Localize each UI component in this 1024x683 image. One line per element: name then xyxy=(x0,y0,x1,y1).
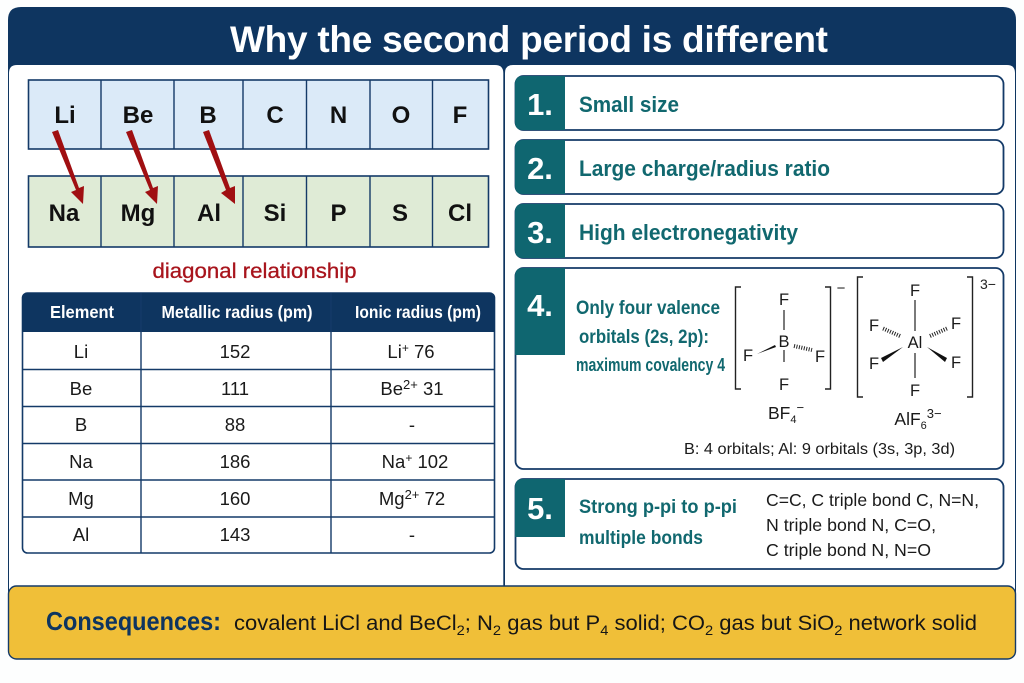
card 5: multiple bonds xyxy=(515,479,1004,569)
table header xyxy=(22,293,495,332)
table rows: Li xyxy=(74,341,88,362)
period 2 row: F xyxy=(453,102,467,129)
card 5 bond list: C=C, C triple bond C, N=N, xyxy=(766,490,979,510)
structure: BF4: BF xyxy=(768,403,790,423)
period 3 row: Cl xyxy=(448,200,472,227)
table rows: B xyxy=(75,414,87,435)
consequences banner: ; N xyxy=(465,612,493,635)
card 3: electronegativity: 3. xyxy=(527,215,553,250)
consequences banner: Consequences: xyxy=(46,606,221,636)
consequences banner: covalent LiCl and BeCl xyxy=(234,612,446,635)
table rows: 102 xyxy=(412,451,448,472)
card 4 text xyxy=(576,297,725,375)
table rows xyxy=(68,341,448,545)
table rows: 152 xyxy=(220,341,250,362)
structure: AlF6: 3− xyxy=(927,406,942,421)
table rows: 2+ xyxy=(405,487,419,502)
consequences banner: 2 xyxy=(457,622,465,638)
period 3 row: Mg xyxy=(121,200,155,227)
structure: AlF6: F xyxy=(910,382,920,400)
table rows: 2+ xyxy=(403,377,418,392)
table rows: Mg xyxy=(68,488,94,509)
structure: AlF6: 6 xyxy=(921,420,927,432)
table rows: Li xyxy=(387,341,402,362)
card 2: charge radius ratio: 2. xyxy=(527,151,553,186)
card 2: charge radius ratio xyxy=(515,140,1004,194)
period 2 row: B xyxy=(199,102,217,129)
card 1: small size: Small size xyxy=(579,92,679,117)
period 2 row: C xyxy=(266,102,284,129)
table header: Ionic radius (pm) xyxy=(355,302,481,322)
period 3 row: Si xyxy=(264,200,286,227)
table rows: 111 xyxy=(221,378,249,399)
structure: BF4: − xyxy=(796,400,804,415)
period 2 row: N xyxy=(330,102,347,129)
structure: BF4: F xyxy=(779,291,789,309)
consequences banner: network solid xyxy=(842,612,977,635)
structure: BF4: 4 xyxy=(790,414,796,426)
table rows: Be xyxy=(70,378,92,399)
structure: AlF6: Al xyxy=(908,334,922,352)
table rows: 72 xyxy=(419,488,445,509)
period 2 row: Li xyxy=(54,102,76,129)
structure: AlF6: F xyxy=(951,315,961,333)
panel: periodic rows xyxy=(28,80,488,283)
card 3: electronegativity xyxy=(515,204,1004,258)
card 4 text: Only four valence xyxy=(576,297,720,319)
card 5 bond list: N triple bond N, C=O, xyxy=(766,515,936,535)
table rows: 186 xyxy=(220,451,250,472)
table rows: Na xyxy=(69,451,94,472)
table header: Metallic radius (pm) xyxy=(162,302,312,322)
card 5 bond list: C triple bond N, N=O xyxy=(766,540,931,560)
consequences banner: 2 xyxy=(493,622,501,638)
diagonal relationship label: diagonal relationship xyxy=(152,260,356,283)
card 5 heading xyxy=(579,496,737,549)
table header: Element xyxy=(50,302,114,322)
table rows: 143 xyxy=(220,524,250,545)
consequences banner: solid; CO xyxy=(608,612,705,635)
card 1: small size xyxy=(515,76,1004,130)
card 4: valence orbitals xyxy=(515,268,1004,469)
card 5 heading: Strong p-pi to p-pi xyxy=(579,496,737,518)
period 2 row xyxy=(28,80,488,149)
card 5 bond list xyxy=(766,490,979,560)
table rows: 76 xyxy=(409,341,435,362)
table rows: 160 xyxy=(220,488,250,509)
table rows: Na xyxy=(382,451,405,472)
orbitals note: B: 4 orbitals; Al: 9 orbitals (3s, 3p, 3d) xyxy=(684,441,955,458)
structure: AlF6: AlF xyxy=(894,409,921,429)
consequences banner: gas but SiO xyxy=(713,612,834,635)
structure: BF4: B xyxy=(778,333,790,351)
structure: BF4: − xyxy=(837,280,846,297)
table rows: Mg xyxy=(379,488,405,509)
card 1: small size: 1. xyxy=(527,87,553,122)
table rows: 88 xyxy=(225,414,245,435)
table rows: + xyxy=(402,341,409,355)
structure: BF4 xyxy=(736,280,846,426)
structure: AlF6 xyxy=(858,276,996,432)
period 3 row: P xyxy=(330,200,347,227)
table: radii xyxy=(22,293,495,553)
arrows: diagonal xyxy=(52,130,235,204)
table rows: - xyxy=(409,524,415,545)
period 3 row: Al xyxy=(197,200,221,227)
structure: BF4: F xyxy=(815,348,825,366)
consequences banner: gas but P xyxy=(501,612,600,635)
consequences banner: 2 xyxy=(705,622,713,638)
card 3: electronegativity: High electronegativity xyxy=(579,220,799,245)
card 5 heading: multiple bonds xyxy=(579,527,703,549)
period 2 row: O xyxy=(392,102,410,129)
consequences banner: 4 xyxy=(600,622,609,638)
period 3 row xyxy=(28,176,488,247)
table rows: - xyxy=(409,414,415,435)
consequences banner xyxy=(8,586,1016,659)
card 2: charge radius ratio: Large charge/radius ratio xyxy=(579,156,830,181)
structure: AlF6: F xyxy=(869,317,879,335)
structure: AlF6: 3− xyxy=(980,276,996,292)
structure: AlF6: F xyxy=(951,354,961,372)
title: Why the second period is different xyxy=(230,19,828,60)
period 2 row: Be xyxy=(123,102,153,129)
table rows: 31 xyxy=(418,378,444,399)
structure: BF4: F xyxy=(743,347,753,365)
card 4 text: maximum covalency 4 xyxy=(576,355,725,375)
period 3 row: S xyxy=(392,200,408,227)
structure: AlF6: F xyxy=(910,282,920,300)
consequences banner: 2 xyxy=(834,622,843,638)
card 5: multiple bonds: 5. xyxy=(527,491,553,526)
card 4 text: orbitals (2s, 2p): xyxy=(579,326,709,348)
table rows: Al xyxy=(73,524,89,545)
period 3 row: Na xyxy=(49,200,80,227)
table rows: Be xyxy=(380,378,403,399)
structure: AlF6: F xyxy=(869,355,879,373)
structure: BF4: F xyxy=(779,376,789,394)
table rows: + xyxy=(405,451,412,465)
card 4: valence orbitals: 4. xyxy=(527,288,553,323)
